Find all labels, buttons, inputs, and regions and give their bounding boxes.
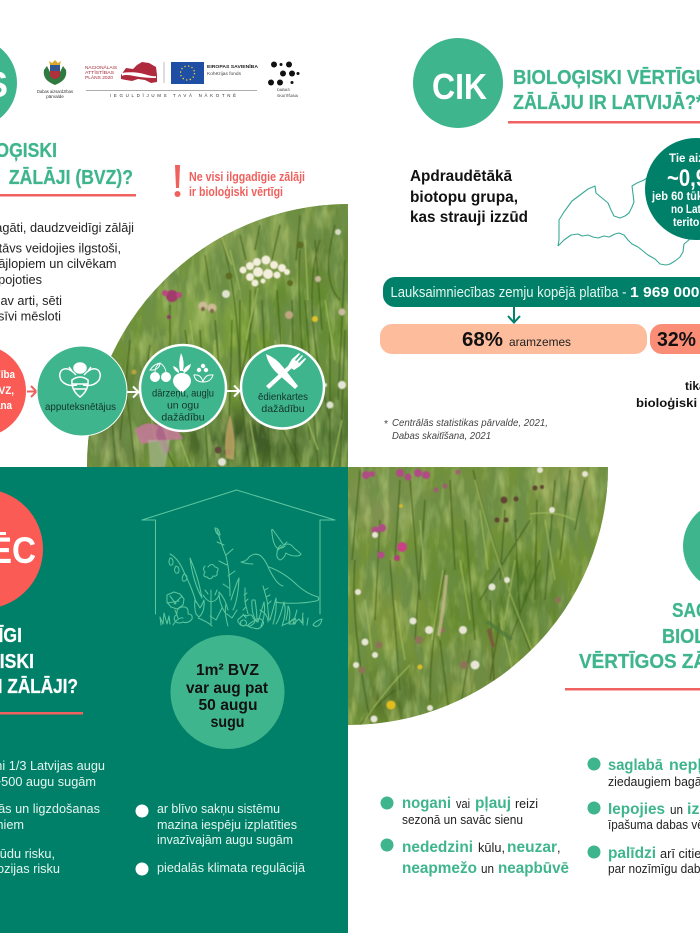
logo: national development plan: ATTĪSTĪBAS xyxy=(85,69,114,75)
list: benefits left column xyxy=(0,758,105,876)
list: benefits right column: invazīvajām augu sugām xyxy=(157,832,293,847)
flow: vegetables and fruit circle xyxy=(140,345,226,431)
logo: national development plan: NACIONĀLAIS xyxy=(85,64,117,70)
icon: radish xyxy=(173,353,191,393)
list: actions left column: neuzar xyxy=(507,839,557,856)
list: actions left column: pļauj xyxy=(475,795,511,812)
bar: grassland 32% xyxy=(650,324,700,354)
icon: cherries xyxy=(150,363,171,382)
arrow: down xyxy=(508,307,520,322)
logo: EU flag xyxy=(171,62,259,84)
heading: why important xyxy=(0,624,83,714)
flow: pollinators circle xyxy=(37,346,127,436)
text block: threatened biotope: Apdraudētākā xyxy=(410,168,512,185)
list: benefits right column xyxy=(136,801,306,876)
icon: tall stem plant xyxy=(215,528,235,596)
logo: nature census: SKAITĪŠANA xyxy=(277,93,298,98)
list: actions right column: saglabā xyxy=(608,757,663,774)
flow: vegetables and fruit circle: dažādību xyxy=(161,412,205,424)
logo: nature census: DABAS xyxy=(277,88,290,92)
icon: berries and leaves xyxy=(194,364,213,382)
logo: national development plan: PLĀNS 2020 xyxy=(85,74,113,80)
list: actions right column: palīdzi xyxy=(608,845,656,862)
logo: coat of arms: Dabas aizsardzības xyxy=(37,89,74,94)
text block: only part biologically valuable xyxy=(636,379,700,410)
list: actions left column: kūlu, xyxy=(478,841,505,855)
circle: species per square metre xyxy=(170,635,284,749)
map: Latvia outline xyxy=(558,176,690,265)
list: actions left column: , xyxy=(557,841,560,855)
circle: area stat xyxy=(645,138,700,240)
icon: bell flower xyxy=(169,554,196,602)
callout: not all grasslands xyxy=(174,165,305,199)
flow: vegetables and fruit circle: un ogu xyxy=(167,400,199,412)
callout: not all grasslands: ir bioloģiski vērtīgi xyxy=(189,185,283,199)
footnote: sources: Dabas skaitīšana, 2021 xyxy=(392,430,491,442)
bar: arable land 68%: aramzemes xyxy=(509,335,571,349)
panel: why (green background) xyxy=(0,467,348,933)
logo: coat of arms: pārvalde xyxy=(46,94,64,99)
flow: pollinators circle: apputeksnētājus xyxy=(45,401,116,413)
heading: how to preserve xyxy=(565,600,700,690)
circle: species per square metre: sugu xyxy=(210,714,244,731)
circle heading: KĀPĒC xyxy=(0,489,43,609)
list: actions left column: vai xyxy=(456,797,470,811)
text block: threatened biotope: biotopu grupa, xyxy=(410,189,518,206)
list: actions left column: neapmežo xyxy=(402,860,477,877)
arrow: red xyxy=(27,386,36,397)
logo: coat of arms xyxy=(37,60,74,99)
list: actions left column: un xyxy=(481,862,494,876)
icon: bird xyxy=(241,554,319,603)
icon: knife and fork xyxy=(266,353,306,389)
bar: total agricultural land xyxy=(383,277,700,307)
icon: bee xyxy=(60,363,100,397)
callout: not all grasslands: Ne visi ilggadīgie zālāji xyxy=(189,170,305,184)
list: actions right column: Iepojies xyxy=(608,801,665,818)
footnote: sources xyxy=(384,417,548,442)
list: actions right column xyxy=(588,757,700,876)
list: actions left column: nededzini xyxy=(402,839,473,856)
list: actions right column: un xyxy=(670,803,683,817)
circle: species per square metre: var aug pat xyxy=(186,680,269,697)
heading: how many xyxy=(508,67,700,124)
flow: red circle biodiversity xyxy=(0,345,26,437)
flow: vegetables and fruit circle: dārzeņu, augļu xyxy=(152,388,214,400)
arrow: white xyxy=(127,386,138,398)
list: actions left column: reizi xyxy=(515,797,538,811)
photo: meadow top-left quarter xyxy=(87,204,348,467)
logo: national development plan xyxy=(85,62,157,83)
list: benefits right column: mazina iespēju izplatīties xyxy=(157,817,297,832)
logo: EU flag: EIROPAS SAVIENĪBA xyxy=(207,63,259,70)
footnote: sources: * xyxy=(384,418,388,430)
list: actions left column: neapbūvē xyxy=(498,860,569,877)
flow: diet diversity circle: dažādību xyxy=(261,403,305,415)
circle: species per square metre: 1m² BVZ xyxy=(196,662,259,679)
icon: house with plants, bird and butterfly xyxy=(142,490,335,629)
text block: threatened biotope xyxy=(410,168,528,226)
circle heading: CIK xyxy=(413,38,503,128)
text block: threatened biotope: kas strauji izzūd xyxy=(410,209,528,226)
slogan: IEGULDĪJUMS TAVĀ NĀKOTNĒ xyxy=(110,93,236,98)
photo: meadow bottom-right quarter xyxy=(340,460,615,730)
bar: grassland 32%: 32% xyxy=(657,329,696,351)
list: benefits right column: piedalās klimata regulācijā xyxy=(157,860,306,875)
heading: what are BVZ xyxy=(0,139,136,196)
list: benefits right column: ar blīvo sakņu sistēmu xyxy=(157,801,280,816)
list: actions left column: sezonā un savāc sienu xyxy=(402,813,523,827)
flow: diet diversity circle xyxy=(241,346,324,428)
list: actions left column: nogani xyxy=(402,795,451,812)
circle heading: KĀ xyxy=(683,501,700,591)
bar: arable land 68% xyxy=(380,324,647,354)
logo: EU flag: Kohēzijas fonds xyxy=(207,71,242,76)
circle heading: KAS xyxy=(0,38,17,128)
list: actions left column xyxy=(380,795,569,877)
icon: low plants and leaves xyxy=(160,592,204,625)
footnote: sources: Centrālās statistikas pārvalde, 2021, xyxy=(392,417,548,429)
circle heading: CIK: CIK xyxy=(432,66,487,107)
icon: butterfly xyxy=(272,529,301,560)
arrow: white xyxy=(227,386,240,396)
logos row xyxy=(37,60,300,99)
text block: BVZ definition xyxy=(0,220,134,324)
circle: species per square metre: 50 augu xyxy=(198,697,258,714)
logo: nature census xyxy=(268,62,300,98)
bar: arable land 68%: 68% xyxy=(462,329,503,351)
icon: flower xyxy=(204,564,218,579)
flow: diet diversity circle: ēdienkartes xyxy=(258,391,308,403)
bar: total agricultural land: Lauksaimniecības zemju kopējā platība - xyxy=(390,284,627,301)
